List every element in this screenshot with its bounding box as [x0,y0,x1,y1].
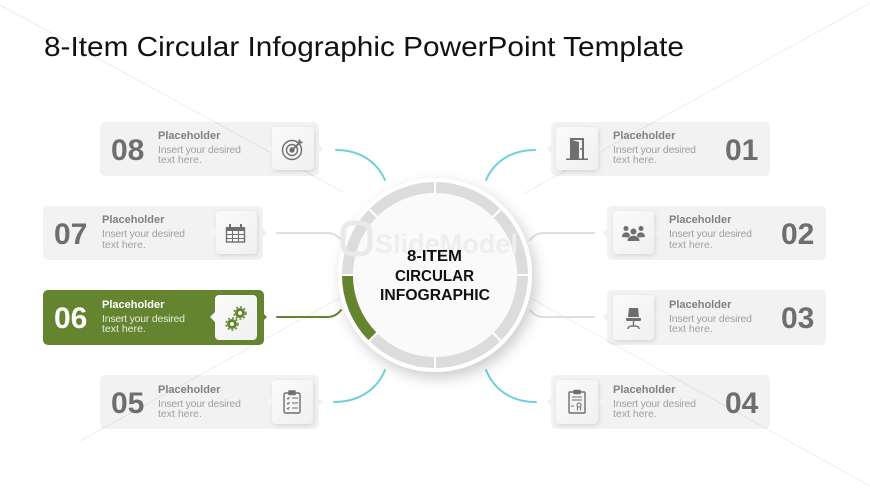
icon: checklist [284,391,300,413]
title: 8-Item Circular Infographic PowerPoint Template [44,31,684,62]
icon: people [622,226,645,241]
panel 08: text here. [158,154,202,166]
icon: certificate clipboard [569,390,585,413]
panel 01: Placeholder [613,130,676,142]
watermark: SlideModel [375,229,518,259]
panel 07: Insert your desired [102,228,185,240]
panel 06 (highlighted): text here. [102,323,146,335]
panel 04: 04 [725,387,759,420]
panel 06 (highlighted): Placeholder [102,299,165,311]
panel 03: text here. [669,323,713,335]
panel 03: Insert your desired [669,313,752,325]
panel 04: Insert your desired [613,398,696,410]
panel 02 [603,206,826,260]
panel 06 (highlighted) [43,290,267,345]
center label: 8-ITEM [407,248,462,265]
inner disc [353,193,517,357]
center label: INFOGRAPHIC [380,287,490,304]
panel 05: text here. [158,408,202,420]
center label [380,248,490,304]
panel 08: Placeholder [158,130,221,142]
white disc [338,178,532,372]
panel 07: 07 [54,218,87,251]
panel 05: Insert your desired [158,398,241,410]
panel 04 [547,375,770,429]
panel 05 [100,375,323,429]
panel 06 (highlighted): 06 [54,302,87,335]
panel 07: Placeholder [102,214,165,226]
panel 02: 02 [781,218,814,251]
watermark [343,223,536,259]
icon: door [566,138,588,160]
panel 04: text here. [613,408,657,420]
panel 02: Insert your desired [669,228,752,240]
center label: CIRCULAR [395,268,474,285]
watermark: .com [521,247,536,254]
icon: calendar [226,224,245,242]
center circle [338,178,536,372]
panel 07 [43,206,267,260]
panel 06 (highlighted): Insert your desired [102,313,185,325]
panel 01: text here. [613,154,657,166]
panel 03: Placeholder [669,299,732,311]
icon: office chair [626,308,641,329]
panel 01: Insert your desired [613,144,696,156]
panel 08 [100,122,323,176]
panel 04: Placeholder [613,384,676,396]
panel 01 [547,122,770,176]
panel 02: text here. [669,239,713,251]
ring segments [348,188,522,362]
panel 03 [603,290,826,345]
panel 05: 05 [111,387,144,420]
panel 08: 08 [111,134,144,167]
panel 03: 03 [781,302,814,335]
panel 08: Insert your desired [158,144,241,156]
icon: target [282,140,302,160]
panel 01: 01 [725,134,758,167]
icon: gears [226,307,246,330]
panel 07: text here. [102,239,146,251]
panel 02: Placeholder [669,214,732,226]
segment dividers [340,180,530,370]
connectors [277,150,594,402]
panel 05: Placeholder [158,384,221,396]
